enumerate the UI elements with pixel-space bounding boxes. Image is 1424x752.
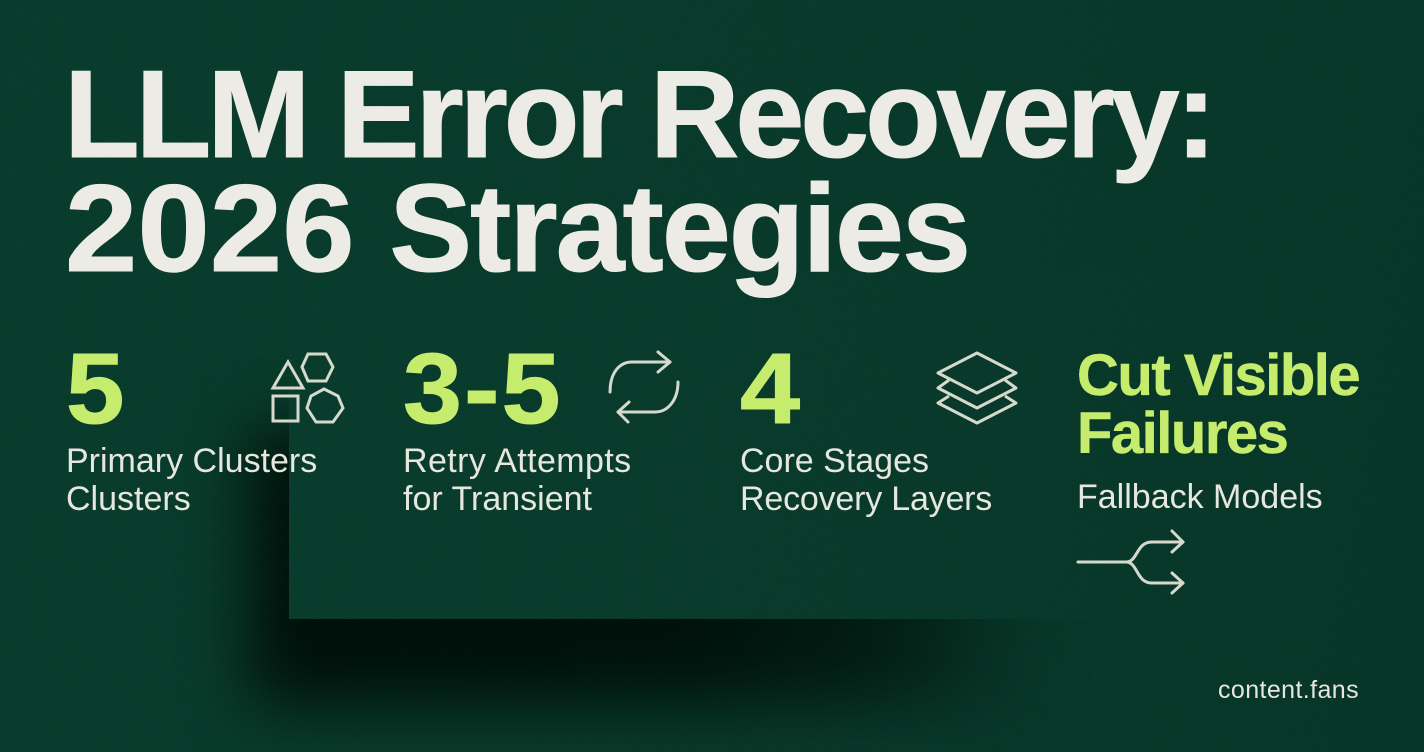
title: LLM Error Recovery: bbox=[64, 46, 1213, 184]
label: fallback models: Fallback Models bbox=[1077, 478, 1323, 516]
stat: primary clusters bbox=[66, 333, 345, 518]
number 3-5: 3-5 bbox=[403, 333, 563, 445]
title bbox=[64, 46, 1213, 298]
label: core stages: Core Stages bbox=[740, 442, 929, 480]
headline: cut visible failures: Cut Visible bbox=[1077, 343, 1359, 408]
stat: retry attempts bbox=[403, 333, 680, 518]
icon: shapes bbox=[270, 352, 345, 424]
label: retry attempts: for Transient bbox=[403, 480, 592, 518]
stat: core stages bbox=[740, 333, 1018, 518]
panel shadow bbox=[250, 430, 1040, 705]
icon: stacked layers bbox=[936, 352, 1018, 424]
title: Strategies bbox=[389, 160, 969, 298]
label: primary clusters bbox=[66, 442, 317, 518]
icon: fork arrow bbox=[1076, 529, 1185, 595]
panel bbox=[289, 270, 1424, 619]
brand footer: content.fans bbox=[1218, 676, 1359, 704]
label: core stages bbox=[740, 442, 992, 518]
headline: cut visible failures: Failures bbox=[1077, 401, 1287, 466]
number 4: 4 bbox=[740, 333, 800, 445]
label: primary clusters: Clusters bbox=[66, 480, 191, 518]
headline: cut visible failures bbox=[1077, 343, 1359, 466]
label: retry attempts bbox=[403, 442, 632, 518]
icon: retry arrows bbox=[608, 350, 680, 424]
title: 2026 bbox=[65, 160, 355, 298]
label: core stages: Recovery Layers bbox=[740, 480, 992, 518]
label: primary clusters: Primary Clusters bbox=[66, 442, 317, 480]
stat: cut visible failures bbox=[1076, 343, 1359, 595]
label: retry attempts: Retry Attempts bbox=[403, 442, 632, 480]
number 5: 5 bbox=[66, 333, 124, 445]
